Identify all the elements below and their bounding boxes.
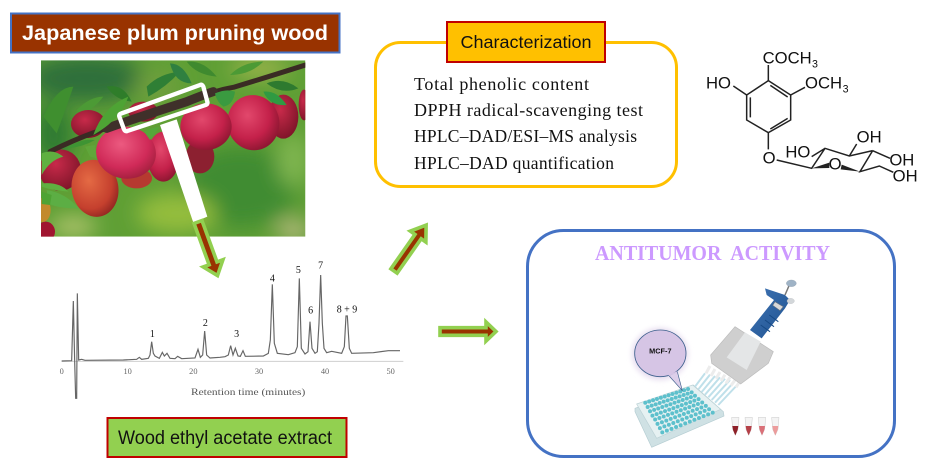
panel: antitumor activity	[528, 230, 894, 456]
atom labels: HO	[785, 143, 810, 162]
MCF-7 cell callout	[632, 328, 688, 391]
method list: HPLC–DAD/ESI–MS analysis	[414, 126, 637, 146]
branch	[50, 65, 305, 152]
MCF-7 cell callout: MCF-7	[649, 347, 672, 356]
atom labels: OH	[893, 167, 918, 186]
trace	[62, 275, 400, 398]
peak labels: 2	[203, 318, 208, 329]
peak labels: 4	[270, 273, 275, 284]
sample tubes	[732, 417, 779, 435]
selection marker on branch	[160, 119, 207, 223]
atom labels: OH	[889, 151, 914, 170]
peak labels: 6	[308, 306, 313, 317]
title: Japanese plum pruning wood	[11, 14, 340, 52]
leaves in front of the fruit	[42, 90, 287, 208]
method list	[414, 74, 643, 173]
arrow: chromatogram to antitumor activity	[440, 322, 496, 341]
peak labels: 8 + 9	[337, 305, 357, 316]
axis tick labels: 40	[321, 367, 329, 376]
chemical structure	[706, 48, 918, 186]
peak labels: 5	[296, 265, 301, 276]
axis tick labels: 10	[124, 367, 132, 376]
peak labels: 1	[150, 329, 155, 340]
wells	[643, 388, 715, 433]
pipette tips	[695, 373, 740, 405]
method list: DPPH radical-scavenging test	[414, 100, 643, 120]
heading: Characterization: Characterization	[460, 32, 592, 52]
peak labels: 3	[234, 329, 239, 340]
leaves behind the fruit	[43, 62, 298, 133]
axis tick labels	[60, 367, 395, 376]
arrow: photo to chromatogram	[188, 218, 227, 279]
chromatogram	[60, 261, 403, 398]
atom labels: 3	[843, 83, 849, 95]
peak labels	[150, 261, 357, 340]
axis tick labels: 30	[255, 367, 263, 376]
title: Japanese plum pruning wood: Japanese plum pruning wood	[22, 21, 328, 45]
baseline axis	[62, 360, 403, 363]
atom labels: O	[829, 154, 842, 173]
photo: plum branch with fruit	[41, 60, 306, 237]
illustration: pipette, plate, cells and tubes	[632, 280, 796, 447]
label: Wood ethyl acetate extract: Wood ethyl acetate extract	[118, 428, 333, 449]
label: Wood ethyl acetate extract	[108, 418, 346, 457]
heading: ANTITUMOR ACTIVITY: ANTITUMOR ACTIVITY	[595, 241, 830, 265]
peak labels: 7	[318, 261, 323, 272]
atom labels	[706, 48, 918, 186]
atom labels: COCH	[763, 48, 812, 67]
axis tick labels: 50	[386, 367, 395, 376]
atom labels: O	[763, 148, 776, 167]
arrow: chromatogram to characterization	[386, 220, 434, 276]
atom labels: OH	[857, 127, 882, 146]
plum fruit	[268, 95, 298, 139]
method list: Total phenolic content	[414, 74, 589, 94]
axis tick labels: 0	[60, 367, 64, 376]
panel: characterization	[376, 22, 676, 186]
axis title: Retention time (minutes)	[191, 387, 305, 398]
atom labels: HO	[706, 73, 731, 92]
method list: HPLC–DAD quantification	[414, 153, 614, 173]
atom labels: OCH	[805, 73, 842, 92]
heading: Characterization	[447, 22, 605, 62]
pipette head	[711, 327, 773, 384]
pipette handle	[750, 280, 796, 338]
axis tick labels: 20	[189, 367, 197, 376]
well plate	[635, 385, 724, 447]
atom labels: 3	[812, 58, 818, 70]
bonds	[733, 65, 893, 172]
